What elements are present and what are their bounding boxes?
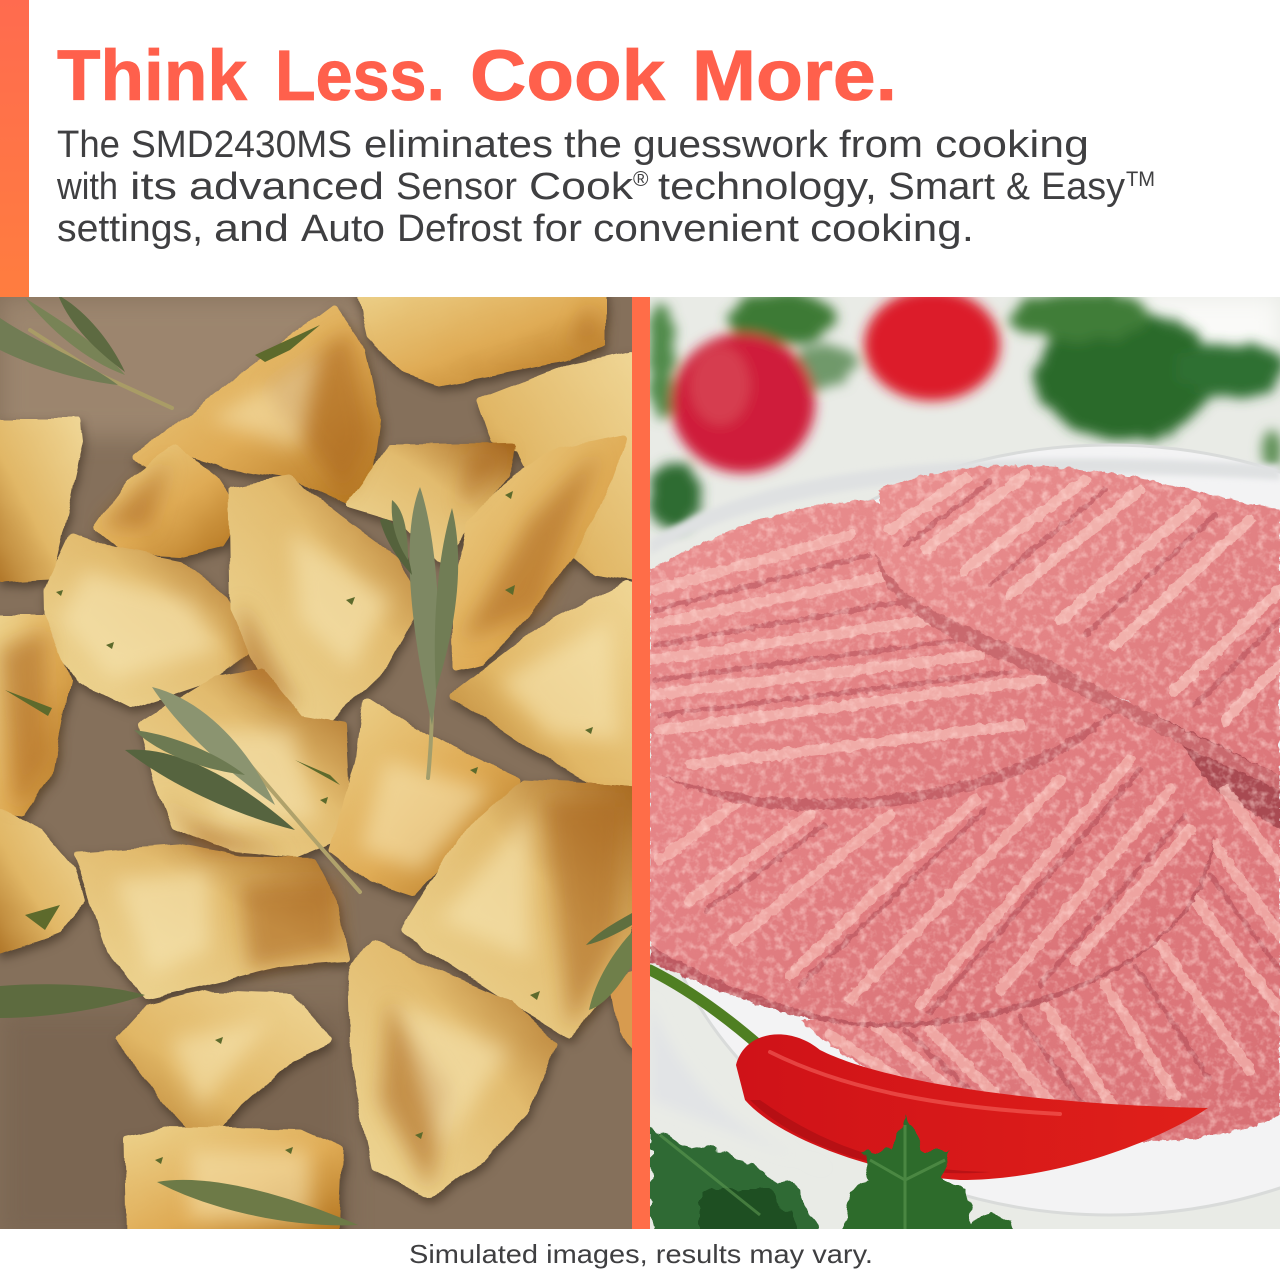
rosemary sprigs lower: [0, 913, 632, 1225]
description text: convenient: [593, 208, 799, 250]
photo: roasted potatoes: [0, 290, 632, 1240]
description text: advanced: [189, 166, 384, 208]
title: More.: [692, 37, 897, 116]
top right patty: [875, 466, 1280, 790]
description text: for: [533, 208, 582, 250]
herb flakes on potatoes: [5, 325, 593, 1164]
left back patty: [650, 500, 1125, 810]
description text: technology,: [658, 166, 877, 208]
description text: [56, 124, 1155, 250]
title: Cook: [470, 37, 666, 116]
description text: Sensor: [396, 166, 517, 208]
white plate: [648, 445, 1280, 1215]
description text: &: [1006, 166, 1030, 208]
description text: cooking.: [810, 208, 974, 250]
red chili pepper: [650, 970, 1208, 1180]
title: Less.: [275, 37, 445, 116]
rosemary sprig top left: [0, 295, 172, 408]
orange side accent bar: [0, 0, 29, 297]
orange divider: [632, 297, 650, 1229]
parsley leaves at bottom: [650, 1112, 1025, 1235]
description text: from: [839, 124, 923, 166]
rosemary sprig centre right: [380, 487, 458, 778]
description text: cooking: [935, 124, 1089, 166]
blurred herbs and peppers background: [648, 289, 1280, 529]
footnote: Simulated images, results may vary.: [409, 1239, 873, 1269]
potato wedges: [0, 290, 632, 1235]
middle front patty: [650, 700, 1213, 1027]
description text: and: [214, 208, 289, 250]
description text: with: [56, 166, 118, 208]
description text: Easy: [1041, 166, 1125, 208]
bottom patty: [800, 700, 1280, 1141]
description text: ®: [633, 168, 649, 191]
description text: eliminates: [364, 124, 553, 166]
description text: Defrost: [397, 208, 522, 250]
description text: Smart: [888, 166, 995, 208]
description text: settings,: [57, 208, 203, 250]
browned potato highlights: [0, 300, 625, 1190]
title: [57, 37, 897, 116]
description text: TM: [1126, 168, 1155, 191]
photo: raw burger patties: [648, 289, 1280, 1235]
rosemary sprig centre left: [125, 687, 360, 892]
description text: the: [564, 124, 622, 166]
title: Think: [57, 37, 248, 116]
description text: guesswork: [633, 124, 829, 166]
description text: Auto: [301, 208, 385, 250]
description text: its: [130, 166, 177, 208]
description text: The: [57, 124, 120, 166]
description text: SMD2430MS: [131, 124, 352, 166]
description text: Cook: [529, 166, 634, 208]
parsley leaf veins: [660, 1125, 945, 1229]
